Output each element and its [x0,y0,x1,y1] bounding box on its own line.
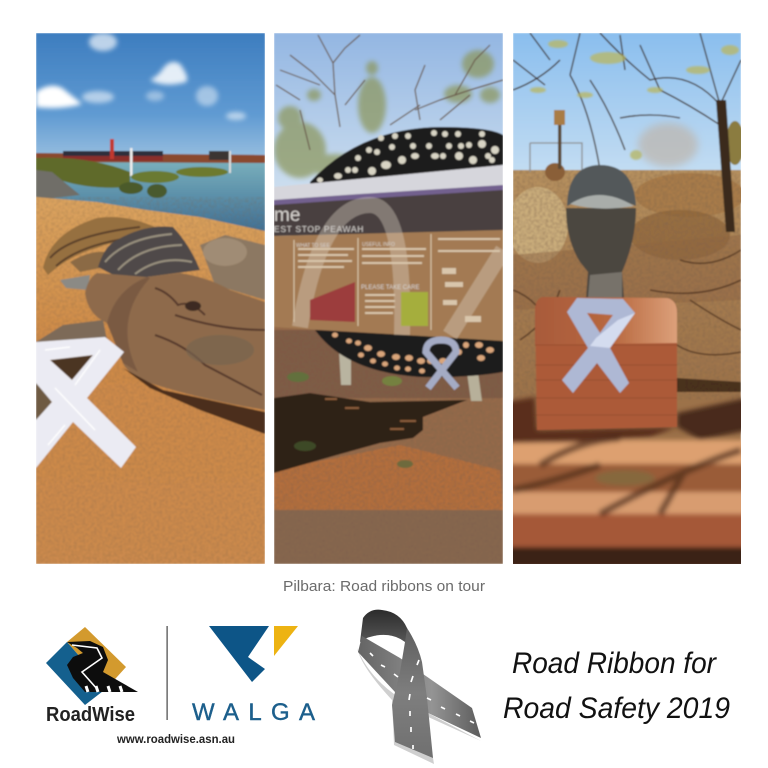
panel: photo of Peawah rest stop sign [274,33,503,564]
plinth [535,343,678,431]
panel: photo of head sculpture on plinth [505,33,750,567]
ribbon on plinth [562,298,635,393]
caption: Pilbara: Road ribbons on tour [283,578,485,595]
shadow under head [123,368,265,434]
logo: WALGA [192,626,315,726]
small ribbon on sign [426,340,457,388]
sign lettering [274,205,419,291]
panel: photo of crocodile sculpture on the beach [36,33,265,564]
white ribbon on the sand [36,337,136,468]
title: Road Ribbon for Road Safety 2019: Road Safety 2019 [503,692,730,725]
sign lettering: WHAT TO SEE [296,243,330,249]
logo: RoadWise [46,627,138,726]
sign lettering: me [274,205,300,226]
icon: road ribbon [357,610,481,764]
title: Road Ribbon for Road Safety 2019 [503,647,730,725]
tree shadow on ground [274,393,467,473]
title: Road Ribbon for Road Safety 2019: Road Ribbon for [512,647,717,680]
ground shadow stripes at right [677,378,741,392]
crocodile tail [43,217,165,275]
tree foliage [274,50,500,178]
rocks behind the crocodile [200,235,265,300]
croc leg [36,320,107,342]
RoadWise wordmark: RoadWise [46,704,135,726]
crocodile back scales [98,227,200,280]
sign lettering: PLEASE TAKE CARE [361,285,419,291]
crocodile head [85,273,265,410]
tree trunk and branches [716,100,735,232]
head sculpture [566,208,636,298]
divider line [166,626,168,720]
perforated black oval [310,127,503,190]
sign lettering: EST STOP PEAWAH [274,224,364,234]
website address: www.roadwise.asn.au [116,734,235,746]
sign posts [339,352,351,385]
paving below plinth [505,397,750,567]
WALGA wordmark: WALGA [192,699,315,726]
sign lettering: USEFUL INFO [362,242,395,248]
